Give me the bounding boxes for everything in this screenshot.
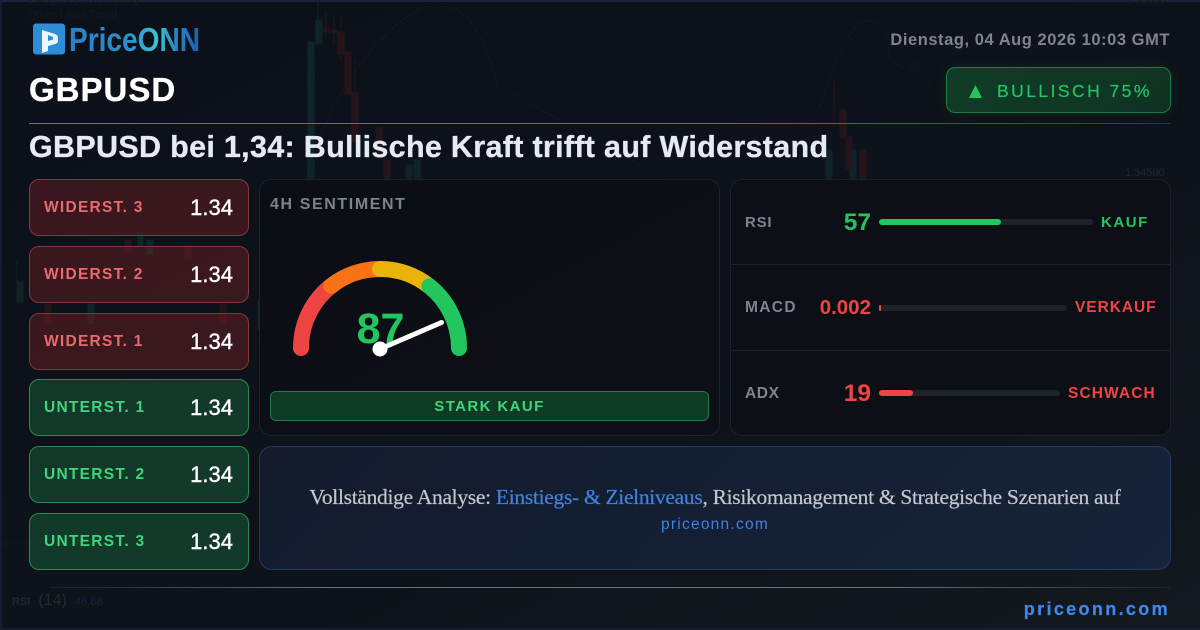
call to action text: Vollständige Analyse: Einstiegs- & Zielniveaus, Risikomanagement & Strategische Szenarien auf xyxy=(309,485,1121,509)
level: support 2 xyxy=(29,446,249,503)
sentiment heading: 4H SENTIMENT xyxy=(270,196,407,213)
gauge verdict: STARK KAUF xyxy=(434,398,545,415)
gauge needle xyxy=(372,322,442,356)
panel: call to action xyxy=(259,446,1171,570)
indicator: MACD: MACD xyxy=(745,299,797,316)
level: support 1: 1.34 xyxy=(190,395,233,420)
icon: logo mark xyxy=(33,24,65,54)
indicator: RSI xyxy=(745,209,1149,236)
level: support 3: 1.34 xyxy=(190,529,233,554)
indicator: ADX: 19 xyxy=(844,380,871,407)
background chart: 000 xyxy=(1136,81,1154,93)
level: resistance 3 xyxy=(29,179,249,236)
gauge chart xyxy=(293,261,467,356)
level: support 3 xyxy=(29,513,249,570)
level: resistance 1: 1.34 xyxy=(190,329,233,354)
level: resistance 2 xyxy=(29,246,249,303)
footer divider xyxy=(50,587,1170,588)
level: support 2: 1.34 xyxy=(190,462,233,487)
indicator: RSI: RSI xyxy=(745,214,772,231)
footer brand link: priceonn.com xyxy=(1024,599,1170,619)
level: resistance 3: 1.34 xyxy=(190,195,233,220)
background chart: 1.34500 xyxy=(1125,167,1165,179)
panel: 4H sentiment xyxy=(259,179,720,436)
indicator: ADX: ADX xyxy=(745,385,780,402)
level: resistance 1 xyxy=(29,313,249,370)
level: resistance 2: WIDERST. 2 xyxy=(44,266,144,283)
background chart: Oliver Level Trend xyxy=(28,9,117,21)
indicator: MACD xyxy=(745,296,1157,319)
badge label: BULLISCH 75% xyxy=(997,81,1152,101)
panel: indicators xyxy=(730,179,1171,436)
gauge verdict xyxy=(270,391,709,421)
indicator: ADX: SCHWACH xyxy=(1068,385,1156,402)
footer RSI watermark: RSI (14) 46.68 xyxy=(12,592,102,609)
background chart: .68 xyxy=(906,61,921,73)
gauge value: 87 xyxy=(357,305,404,353)
level: support 2: UNTERST. 2 xyxy=(44,466,145,483)
call to action link: priceonn.com xyxy=(661,516,769,533)
indicator: MACD: 0.002 xyxy=(820,296,871,319)
indicator: MACD: VERKAUF xyxy=(1075,299,1157,316)
level: support 1 xyxy=(29,379,249,436)
logo xyxy=(33,22,200,56)
level: support 3: UNTERST. 3 xyxy=(44,533,145,550)
level: resistance 3: WIDERST. 3 xyxy=(44,199,144,216)
background chart: 00 07 xyxy=(2,540,30,552)
indicator: RSI: KAUF xyxy=(1101,214,1149,231)
level: support 1: UNTERST. 1 xyxy=(44,399,145,416)
pair title: GBPUSD xyxy=(29,71,176,108)
date and time: Dienstag, 04 Aug 2026 10:03 GMT xyxy=(890,31,1170,49)
header divider xyxy=(29,123,1171,124)
sentiment badge xyxy=(946,67,1171,113)
icon: up triangle xyxy=(969,85,982,98)
indicator: RSI: 57 xyxy=(844,209,871,236)
level: resistance 1: WIDERST. 1 xyxy=(44,333,144,350)
headline: GBPUSD bei 1,34: Bullische Kraft trifft auf Widerstand xyxy=(29,130,828,164)
level: resistance 2: 1.34 xyxy=(190,262,233,287)
indicator: ADX xyxy=(745,380,1156,407)
